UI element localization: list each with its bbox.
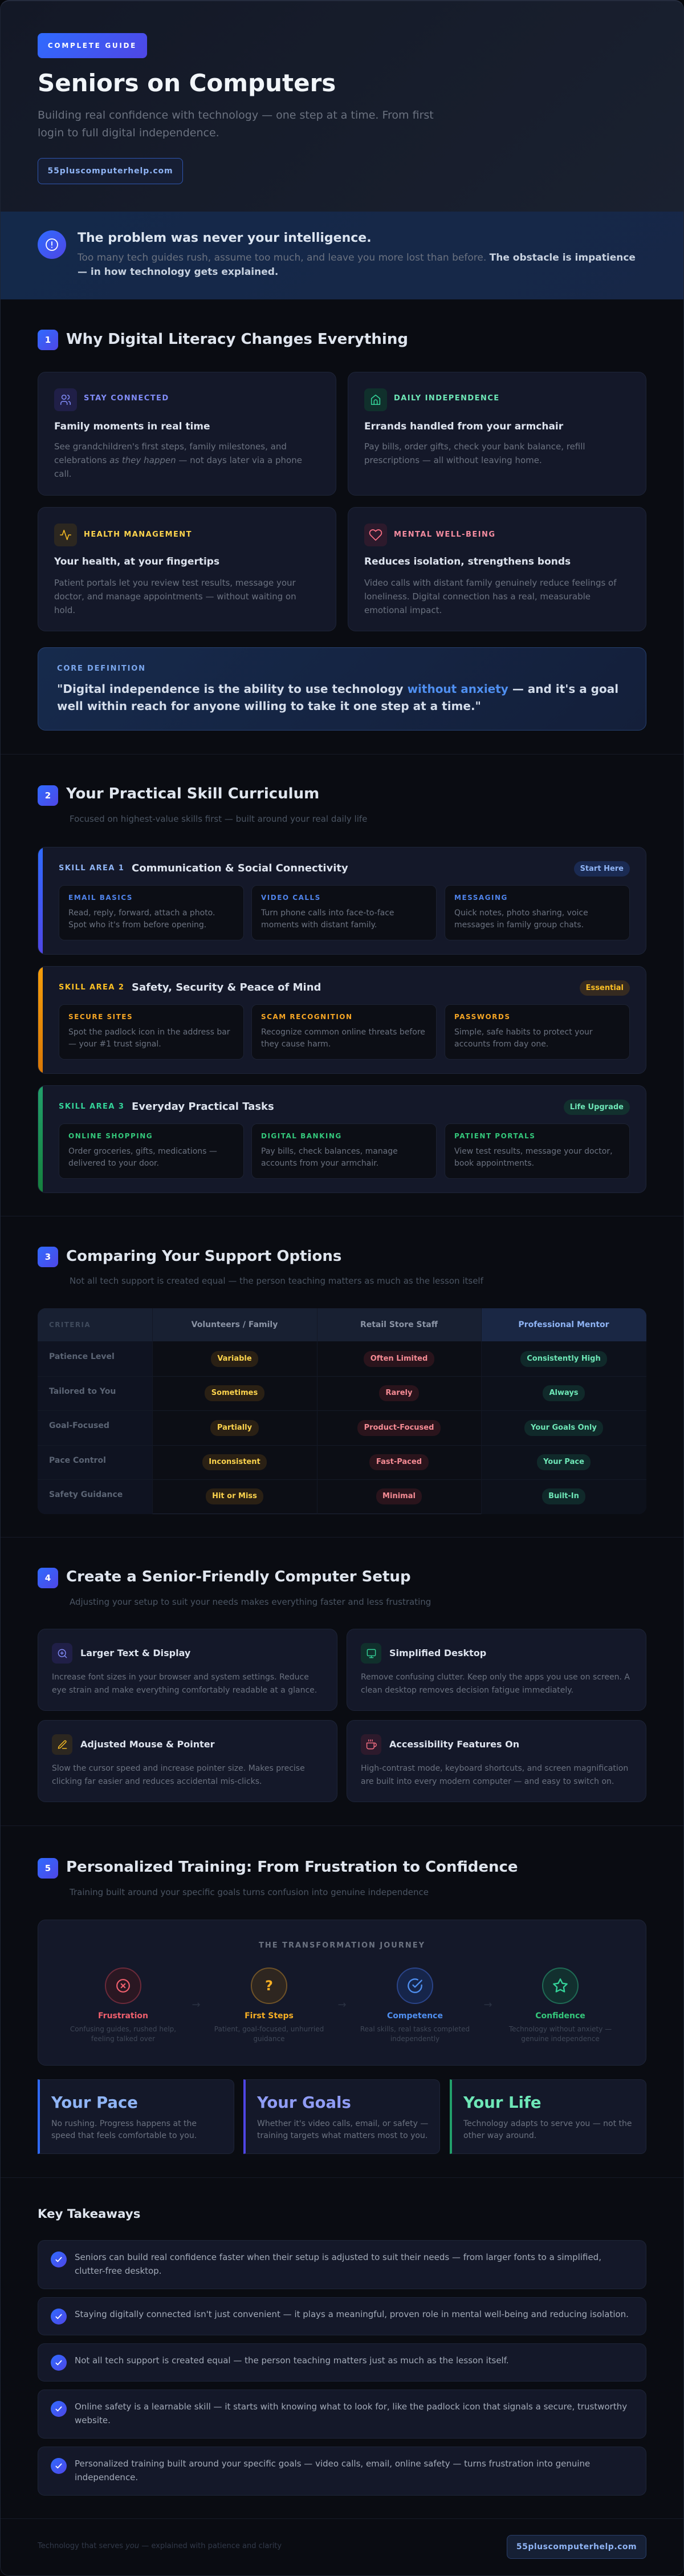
tag: Start Here bbox=[580, 865, 624, 873]
card title: Your health, at your fingertips bbox=[54, 556, 219, 567]
step text: genuine independence bbox=[521, 2035, 600, 2043]
principle text bbox=[257, 2118, 428, 2142]
skill text bbox=[261, 908, 394, 930]
icon: people bbox=[54, 388, 77, 411]
card title: Reduces isolation, strengthens bonds bbox=[364, 556, 571, 567]
card text: call. bbox=[54, 469, 72, 479]
skill text: book appointments. bbox=[454, 1159, 534, 1168]
icon: question mark: ? bbox=[265, 1978, 273, 1994]
step text: Confusing guides, rushed help, bbox=[70, 2025, 176, 2033]
skill text: Pay bills, check balances, manage bbox=[261, 1147, 398, 1156]
principle: your pace bbox=[38, 2079, 234, 2154]
skill text: Turn phone calls into face-to-face bbox=[261, 908, 394, 918]
section 4 number: 4 bbox=[45, 1573, 51, 1583]
comparison table bbox=[38, 1308, 646, 1514]
row: tailored bbox=[49, 1385, 585, 1401]
skill name: PATIENT PORTALS bbox=[454, 1132, 535, 1140]
footer note: Technology that serves you — explained with patience and clarity bbox=[38, 2542, 282, 2550]
icon: heart bbox=[364, 524, 387, 546]
card text: celebrations as they happen — not days later via a phone bbox=[54, 455, 302, 465]
card text: loneliness. Digital connection has a real, measurable bbox=[364, 591, 591, 602]
setup text bbox=[52, 1673, 317, 1695]
skill text bbox=[454, 908, 588, 930]
skill text bbox=[261, 1028, 425, 1049]
skill text: — your #1 trust signal. bbox=[68, 1040, 161, 1049]
retail value: Product-Focused bbox=[364, 1423, 434, 1431]
icon: cup bbox=[361, 1734, 381, 1755]
takeaway text: Seniors can build real confidence faster when their setup is adjusted to suit their needs — from larger fonts to a simplified, bbox=[75, 2252, 601, 2262]
header: volunteers: Volunteers / Family bbox=[192, 1320, 278, 1329]
step: frustration bbox=[55, 0, 192, 2053]
banner text: — in how technology gets explained. bbox=[78, 266, 278, 278]
retail value: Often Limited bbox=[370, 1354, 427, 1363]
card title: Errands handled from your armchair bbox=[364, 421, 563, 432]
banner text: Too many tech guides rush, assume too much, and leave you more lost than before. The obstacle is impatience bbox=[78, 252, 636, 263]
card text bbox=[54, 578, 296, 615]
footer website pill: 55pluscomputerhelp.com bbox=[516, 2542, 637, 2551]
section 3 subtitle: Not all tech support is created equal — the person teaching matters as much as the lesson itself bbox=[70, 1276, 483, 1286]
icon: x circle bbox=[105, 1968, 141, 2004]
principle title: Your Life bbox=[463, 2094, 542, 2112]
step text: Real skills, real tasks completed bbox=[360, 2025, 470, 2033]
card text bbox=[364, 441, 585, 465]
icon: check bbox=[51, 2401, 67, 2417]
core definition callout bbox=[38, 647, 646, 731]
section 4 number bbox=[38, 1568, 58, 1588]
principle text: speed that feels comfortable to you. bbox=[51, 2131, 197, 2140]
step name: Confidence bbox=[535, 2011, 585, 2021]
card text: prescriptions — all without leaving home. bbox=[364, 455, 542, 465]
section 5 number: 5 bbox=[45, 1863, 51, 1873]
takeaway text: Not all tech support is created equal — the person teaching matters just as much as the lesson itself. bbox=[75, 2355, 509, 2366]
skill area 3 bbox=[38, 1085, 646, 1193]
step: first steps bbox=[201, 0, 337, 2053]
setup title: Simplified Desktop bbox=[389, 1648, 486, 1658]
tag bbox=[564, 1100, 630, 1115]
skill text bbox=[68, 1028, 230, 1049]
website pill: 55pluscomputerhelp.com bbox=[47, 167, 173, 176]
arrow: → bbox=[192, 1999, 201, 2011]
callout quote: "Digital independence is the ability to use technology without anxiety — and it's a goal bbox=[57, 682, 618, 696]
accent bar bbox=[38, 966, 43, 1074]
setup text: High-contrast mode, keyboard shortcuts, and screen magnification bbox=[361, 1764, 628, 1773]
website pill bbox=[38, 158, 183, 184]
icon: check bbox=[51, 2252, 67, 2267]
card text: Patient portals let you review test results, message your bbox=[54, 578, 296, 588]
setup card: simplified desktop bbox=[347, 1629, 646, 1711]
header: retail: Retail Store Staff bbox=[360, 1320, 438, 1329]
volunteers value: Partially bbox=[217, 1423, 252, 1431]
card: mental well-being bbox=[348, 507, 646, 631]
skill text: Spot the padlock icon in the address bar bbox=[68, 1028, 230, 1037]
step: confidence bbox=[492, 0, 629, 2053]
principle text: Technology adapts to serve you — not the bbox=[463, 2119, 632, 2128]
setup text: Remove confusing clutter. Keep only the apps you use on screen. A bbox=[361, 1673, 630, 1682]
skill text bbox=[68, 1147, 217, 1168]
icon: check bbox=[51, 2355, 67, 2371]
setup title: Larger Text & Display bbox=[80, 1648, 190, 1658]
takeaway text: Staying digitally connected isn't just convenient — it plays a meaningful, proven role in mental well-being and reducing isolation. bbox=[75, 2309, 629, 2319]
label: HEALTH MANAGEMENT bbox=[84, 530, 192, 539]
banner heading: The problem was never your intelligence. bbox=[78, 231, 372, 245]
step text bbox=[347, 2025, 483, 2044]
subtitle: login to full digital independence. bbox=[38, 127, 219, 139]
mentor value: Your Pace bbox=[543, 1458, 584, 1466]
icon: star bbox=[542, 1968, 579, 2004]
row label: Pace Control bbox=[49, 1456, 106, 1465]
principle text: No rushing. Progress happens at the bbox=[51, 2119, 197, 2128]
skill name: ONLINE SHOPPING bbox=[68, 1132, 153, 1140]
setup text: clicking far easier and reduces accidental mis-clicks. bbox=[52, 1777, 262, 1786]
arrow: → bbox=[483, 1999, 492, 2011]
takeaway text: website. bbox=[75, 2415, 111, 2425]
skill text bbox=[454, 1028, 593, 1049]
takeaway text: Online safety is a learnable skill — it starts with knowing what to look for, like the padlock icon that signals a secure, trustworthy bbox=[75, 2401, 627, 2412]
principle text bbox=[463, 2118, 632, 2142]
skill text: messages in family group chats. bbox=[454, 920, 584, 930]
skill: shopping bbox=[59, 1123, 244, 1179]
step text: guidance bbox=[253, 2035, 285, 2043]
section 4 subtitle: Adjusting your setup to suit your needs makes everything faster and less frustrating bbox=[70, 1597, 431, 1607]
skill text: View test results, message your doctor, bbox=[454, 1147, 613, 1156]
skill: passwords bbox=[445, 1004, 630, 1060]
row label: Tailored to You bbox=[49, 1387, 116, 1396]
setup text bbox=[52, 1762, 305, 1788]
skill: scams bbox=[251, 1004, 437, 1060]
area title: Communication & Social Connectivity bbox=[132, 862, 348, 874]
retail value: Minimal bbox=[382, 1492, 416, 1500]
icon: magnifier bbox=[52, 1643, 72, 1664]
skill name: DIGITAL BANKING bbox=[261, 1132, 342, 1140]
mentor header shade bbox=[481, 1308, 646, 1341]
skill text: they cause harm. bbox=[261, 1040, 331, 1049]
row label: Goal-Focused bbox=[49, 1421, 109, 1430]
mentor value: Built-In bbox=[548, 1492, 579, 1500]
section 3 heading: Comparing Your Support Options bbox=[66, 1248, 341, 1265]
label: STAY CONNECTED bbox=[84, 394, 169, 403]
takeaway 3 bbox=[38, 2343, 646, 2382]
accent bar bbox=[38, 847, 43, 955]
row: pace bbox=[49, 1454, 591, 1470]
step text bbox=[201, 2025, 337, 2044]
section 1 number bbox=[38, 330, 58, 350]
setup text: clean desktop removes decision fatigue immediately. bbox=[361, 1686, 573, 1695]
label: DAILY INDEPENDENCE bbox=[394, 394, 500, 403]
callout quote: well within reach for anyone willing to take it one step at a time." bbox=[57, 699, 481, 713]
principle text: training targets what matters most to you. bbox=[257, 2131, 427, 2140]
step name: Competence bbox=[387, 2011, 443, 2021]
arrow: → bbox=[337, 1999, 347, 2011]
column shade: mentor bbox=[481, 1341, 646, 1514]
badge: COMPLETE GUIDE bbox=[48, 42, 137, 50]
icon: monitor bbox=[361, 1643, 381, 1664]
label: MENTAL WELL-BEING bbox=[394, 530, 495, 539]
table header bbox=[38, 1308, 646, 1341]
icon: pen bbox=[52, 1734, 72, 1755]
skill text bbox=[68, 908, 215, 930]
skill text: Order groceries, gifts, medications — bbox=[68, 1147, 217, 1156]
setup title: Accessibility Features On bbox=[389, 1739, 519, 1750]
setup card: mouse bbox=[38, 1720, 337, 1802]
section 2 number: 2 bbox=[45, 790, 51, 801]
step text bbox=[55, 2025, 192, 2044]
card text: emotional impact. bbox=[364, 605, 442, 615]
card: stay connected bbox=[38, 372, 336, 496]
takeaway text bbox=[75, 2400, 627, 2427]
card text: See grandchildren's first steps, family milestones, and bbox=[54, 441, 287, 452]
tag: Life Upgrade bbox=[570, 1103, 624, 1111]
problem banner bbox=[0, 212, 684, 299]
takeaway text: independence. bbox=[75, 2472, 138, 2482]
setup text: are built into every modern computer — and easy to switch on. bbox=[361, 1777, 614, 1786]
tag bbox=[580, 980, 630, 996]
principle: your goals bbox=[243, 2079, 440, 2154]
mentor value: Always bbox=[549, 1389, 579, 1397]
takeaway 2 bbox=[38, 2297, 646, 2335]
skill text: Simple, safe habits to protect your bbox=[454, 1028, 593, 1037]
section 1 heading: Why Digital Literacy Changes Everything bbox=[66, 331, 408, 348]
header: mentor: Professional Mentor bbox=[518, 1320, 609, 1329]
step text: independently bbox=[390, 2035, 439, 2043]
banner text bbox=[78, 252, 636, 278]
skill name: EMAIL BASICS bbox=[68, 894, 133, 902]
row label: Patience Level bbox=[49, 1352, 115, 1361]
skill area 1 bbox=[38, 847, 646, 955]
icon: alert circle bbox=[38, 230, 66, 259]
setup text bbox=[361, 1671, 630, 1697]
icon: house bbox=[364, 388, 387, 411]
principle text: other way around. bbox=[463, 2131, 536, 2140]
hero panel bbox=[0, 0, 684, 212]
section 4 heading: Create a Senior-Friendly Computer Setup bbox=[66, 1568, 411, 1585]
row: patience bbox=[49, 1351, 607, 1367]
section 2 heading: Your Practical Skill Curriculum bbox=[66, 785, 319, 802]
skill text: Spot who it's from before opening. bbox=[68, 920, 206, 930]
skill text: Recognize common online threats before bbox=[261, 1028, 425, 1037]
callout label: CORE DEFINITION bbox=[57, 664, 146, 673]
skill text: moments with distant family. bbox=[261, 920, 377, 930]
principle text: Whether it's video calls, email, or safety — bbox=[257, 2119, 428, 2128]
area label: SKILL AREA 1 bbox=[59, 864, 124, 873]
card text: Pay bills, order gifts, check your bank balance, refill bbox=[364, 441, 585, 452]
volunteers value: Variable bbox=[217, 1354, 252, 1363]
row label: Safety Guidance bbox=[49, 1490, 123, 1499]
step text: Technology without anxiety — bbox=[509, 2025, 612, 2033]
skill name: SECURE SITES bbox=[68, 1013, 133, 1021]
takeaway 4 bbox=[38, 2390, 646, 2439]
setup text: Increase font sizes in your browser and system settings. Reduce bbox=[52, 1673, 309, 1682]
card text: doctor, and manage appointments — without waiting on bbox=[54, 591, 296, 602]
section 1 number: 1 bbox=[45, 335, 51, 345]
skill text: delivered to your door. bbox=[68, 1159, 159, 1168]
step text: feeling talked over bbox=[91, 2035, 155, 2043]
skill text: Read, reply, forward, attach a photo. bbox=[68, 908, 215, 918]
mentor value: Consistently High bbox=[527, 1354, 601, 1363]
step: competence bbox=[347, 0, 483, 2053]
key takeaways heading: Key Takeaways bbox=[38, 2207, 140, 2221]
tag: Essential bbox=[586, 984, 624, 992]
card text bbox=[364, 578, 617, 615]
area label: SKILL AREA 3 bbox=[59, 1102, 124, 1111]
takeaway 5 bbox=[38, 2447, 646, 2496]
row: safety bbox=[49, 1488, 585, 1504]
skill: portals bbox=[445, 1123, 630, 1179]
skill: banking bbox=[251, 1123, 437, 1179]
principle text bbox=[51, 2118, 197, 2142]
icon: check bbox=[51, 2458, 67, 2474]
area label: SKILL AREA 2 bbox=[59, 983, 124, 992]
retail value: Rarely bbox=[386, 1389, 412, 1397]
subtitle bbox=[38, 109, 434, 139]
takeaway 1 bbox=[38, 2240, 646, 2289]
card: health management bbox=[38, 507, 336, 631]
skill text bbox=[454, 1147, 613, 1168]
takeaway text bbox=[75, 2250, 601, 2278]
section 2 subtitle: Focused on highest-value skills first — built around your real daily life bbox=[70, 814, 367, 824]
skill name: PASSWORDS bbox=[454, 1013, 511, 1021]
section 3 number bbox=[38, 1247, 58, 1267]
takeaway text bbox=[75, 2457, 590, 2484]
step name: Frustration bbox=[98, 2011, 148, 2021]
icon: check bbox=[51, 2309, 67, 2325]
section 2 number bbox=[38, 785, 58, 806]
volunteers value: Sometimes bbox=[211, 1389, 258, 1397]
setup text bbox=[361, 1762, 628, 1788]
card text bbox=[54, 441, 302, 479]
card title: Family moments in real time bbox=[54, 421, 210, 432]
skill text: accounts from day one. bbox=[454, 1040, 548, 1049]
skill text: Quick notes, photo sharing, voice bbox=[454, 908, 588, 918]
criteria header: CRITERIA bbox=[49, 1321, 91, 1329]
section 5 heading: Personalized Training: From Frustration to Confidence bbox=[66, 1859, 518, 1876]
skill: email bbox=[59, 885, 244, 940]
section 5 number bbox=[38, 1858, 58, 1879]
takeaway text: Personalized training built around your specific goals — video calls, email, online safety — turns frustration into genuine bbox=[75, 2459, 590, 2469]
card text: hold. bbox=[54, 605, 75, 615]
principle: your life bbox=[450, 2079, 646, 2154]
journey title: THE TRANSFORMATION JOURNEY bbox=[259, 1941, 425, 1950]
footer website pill bbox=[507, 2535, 646, 2559]
volunteers value: Hit or Miss bbox=[212, 1492, 257, 1500]
tag bbox=[574, 861, 630, 877]
retail value: Fast-Paced bbox=[376, 1458, 422, 1466]
step name: First Steps bbox=[245, 2011, 294, 2021]
step text: Patient, goal-focused, unhurried bbox=[214, 2025, 324, 2033]
takeaway text: clutter-free desktop. bbox=[75, 2266, 161, 2276]
card text: Video calls with distant family genuinely reduce feelings of bbox=[364, 578, 617, 588]
mentor value: Your Goals Only bbox=[531, 1423, 597, 1431]
skill area 2 bbox=[38, 966, 646, 1074]
column shade: criteria bbox=[38, 1341, 152, 1514]
card: daily independence bbox=[348, 372, 646, 496]
skill text bbox=[261, 1147, 398, 1168]
volunteers value: Inconsistent bbox=[209, 1458, 260, 1466]
skill name: SCAM RECOGNITION bbox=[261, 1013, 353, 1021]
step text bbox=[492, 2025, 629, 2044]
skill: messaging bbox=[445, 885, 630, 940]
principle title: Your Pace bbox=[51, 2094, 138, 2112]
transformation journey panel bbox=[38, 1920, 646, 2066]
skill name: VIDEO CALLS bbox=[261, 894, 321, 902]
title: Seniors on Computers bbox=[38, 69, 336, 97]
setup card: accessibility bbox=[347, 1720, 646, 1802]
section 3 number: 3 bbox=[45, 1252, 51, 1262]
row: goal-focused bbox=[49, 1420, 603, 1436]
section 5 subtitle: Training built around your specific goals turns confusion into genuine independence bbox=[70, 1887, 429, 1897]
badge bbox=[38, 33, 147, 58]
area title: Safety, Security & Peace of Mind bbox=[132, 981, 321, 993]
setup text: Slow the cursor speed and increase pointer size. Makes precise bbox=[52, 1764, 305, 1773]
setup title: Adjusted Mouse & Pointer bbox=[80, 1739, 215, 1750]
skill: video bbox=[251, 885, 437, 940]
area title: Everyday Practical Tasks bbox=[132, 1101, 274, 1113]
setup text: eye strain and make everything comfortably readable at a glance. bbox=[52, 1686, 317, 1695]
callout quote bbox=[57, 682, 618, 713]
accent bar bbox=[38, 1085, 43, 1193]
principle title: Your Goals bbox=[257, 2094, 351, 2112]
skill: secure sites bbox=[59, 1004, 244, 1060]
icon: check circle bbox=[397, 1968, 433, 2004]
skill text: accounts from your armchair. bbox=[261, 1159, 378, 1168]
icon: pulse bbox=[54, 524, 77, 546]
subtitle: Building real confidence with technology — one step at a time. From first bbox=[38, 109, 434, 121]
setup card: larger text bbox=[38, 1629, 337, 1711]
icon: question mark bbox=[251, 1968, 287, 2004]
skill name: MESSAGING bbox=[454, 894, 508, 902]
